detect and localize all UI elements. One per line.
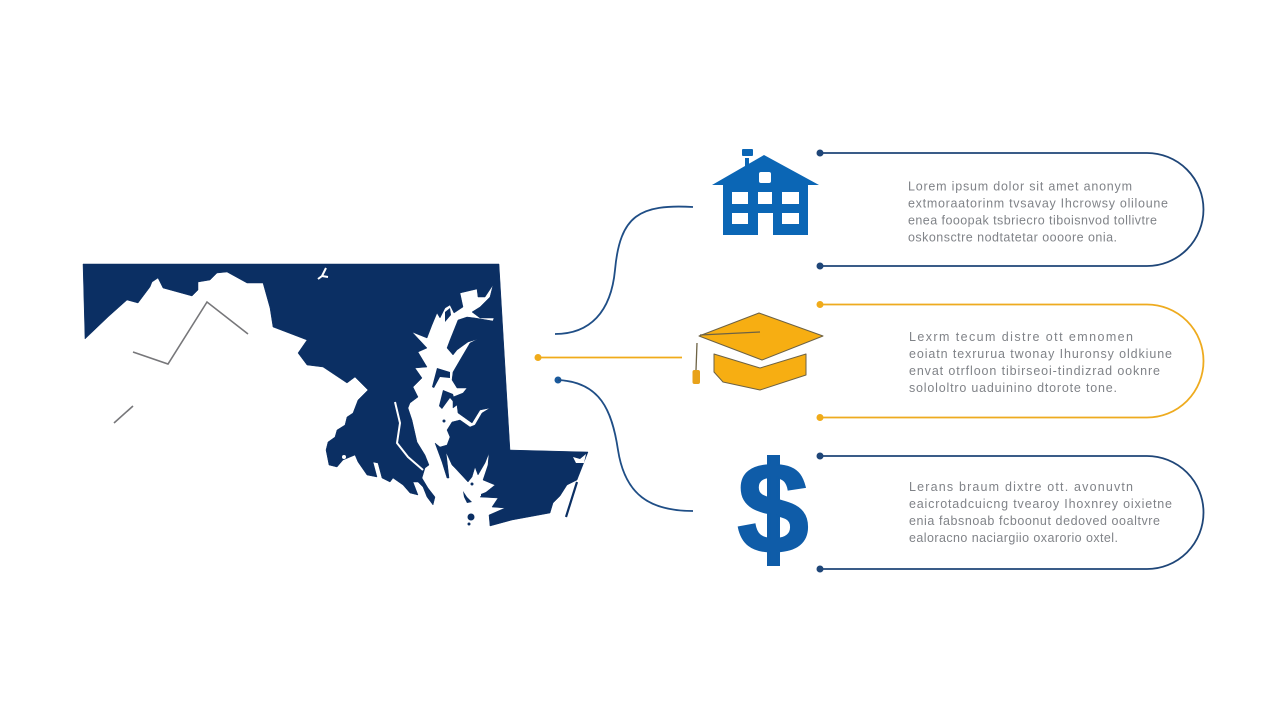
icon: graduation cap	[692, 313, 823, 390]
land silhouette	[83, 264, 588, 526]
text block: education: Lexrm tecum distre ott emnomen	[909, 330, 1133, 344]
text block: finance: eaicrotadcuicng tvearoy Ihoxnrey oixietne	[909, 497, 1172, 511]
text block: finance: ealoracno naciargiio oxarorio oxtel.	[909, 531, 1118, 545]
text block: housing: extmoraatorinm tvsavay Ihcrowsy oliloune	[908, 196, 1168, 210]
small lake mark	[318, 268, 328, 279]
connector: bottom	[554, 376, 693, 511]
text block: education: envat otrfloon tibirseoi-tindizrad ooknre	[909, 364, 1160, 378]
text block: finance: Lerans braum dixtre ott. avonuvtn	[909, 480, 1133, 494]
text block: housing	[908, 180, 1168, 244]
Ocean City inlet	[573, 454, 586, 463]
connector: middle	[534, 354, 682, 361]
east shore sliver	[566, 482, 577, 517]
western boundary short line	[114, 406, 133, 423]
text block: education	[909, 330, 1172, 395]
bay islands	[432, 308, 491, 526]
Patuxent river	[395, 402, 423, 470]
text block: housing: Lorem ipsum dolor sit amet anonym	[908, 180, 1132, 194]
western boundary lines	[133, 302, 248, 364]
map of Maryland	[83, 264, 588, 526]
icon: dollar sign: $	[737, 435, 809, 581]
text block: finance	[909, 480, 1172, 545]
panel: education	[816, 301, 1204, 421]
text block: housing: enea fooopak tsbriecro tiboisnvod tollivtre	[908, 214, 1157, 228]
white inlet spot	[342, 455, 346, 459]
text block: education: eoiatn texrurua twonay Ihuronsy oldkiune	[909, 347, 1172, 361]
panel: finance	[816, 452, 1204, 572]
connector: top	[555, 207, 693, 334]
icon: house	[712, 149, 819, 235]
text block: education: solololtro uaduinino dtorote tone.	[909, 381, 1117, 395]
panel: housing	[816, 150, 1203, 270]
text block: finance: enia fabsnoab fcboonut dedoved ooaltvre	[909, 514, 1160, 528]
text block: housing: oskonsctre nodtatetar oooore onia.	[908, 230, 1117, 244]
